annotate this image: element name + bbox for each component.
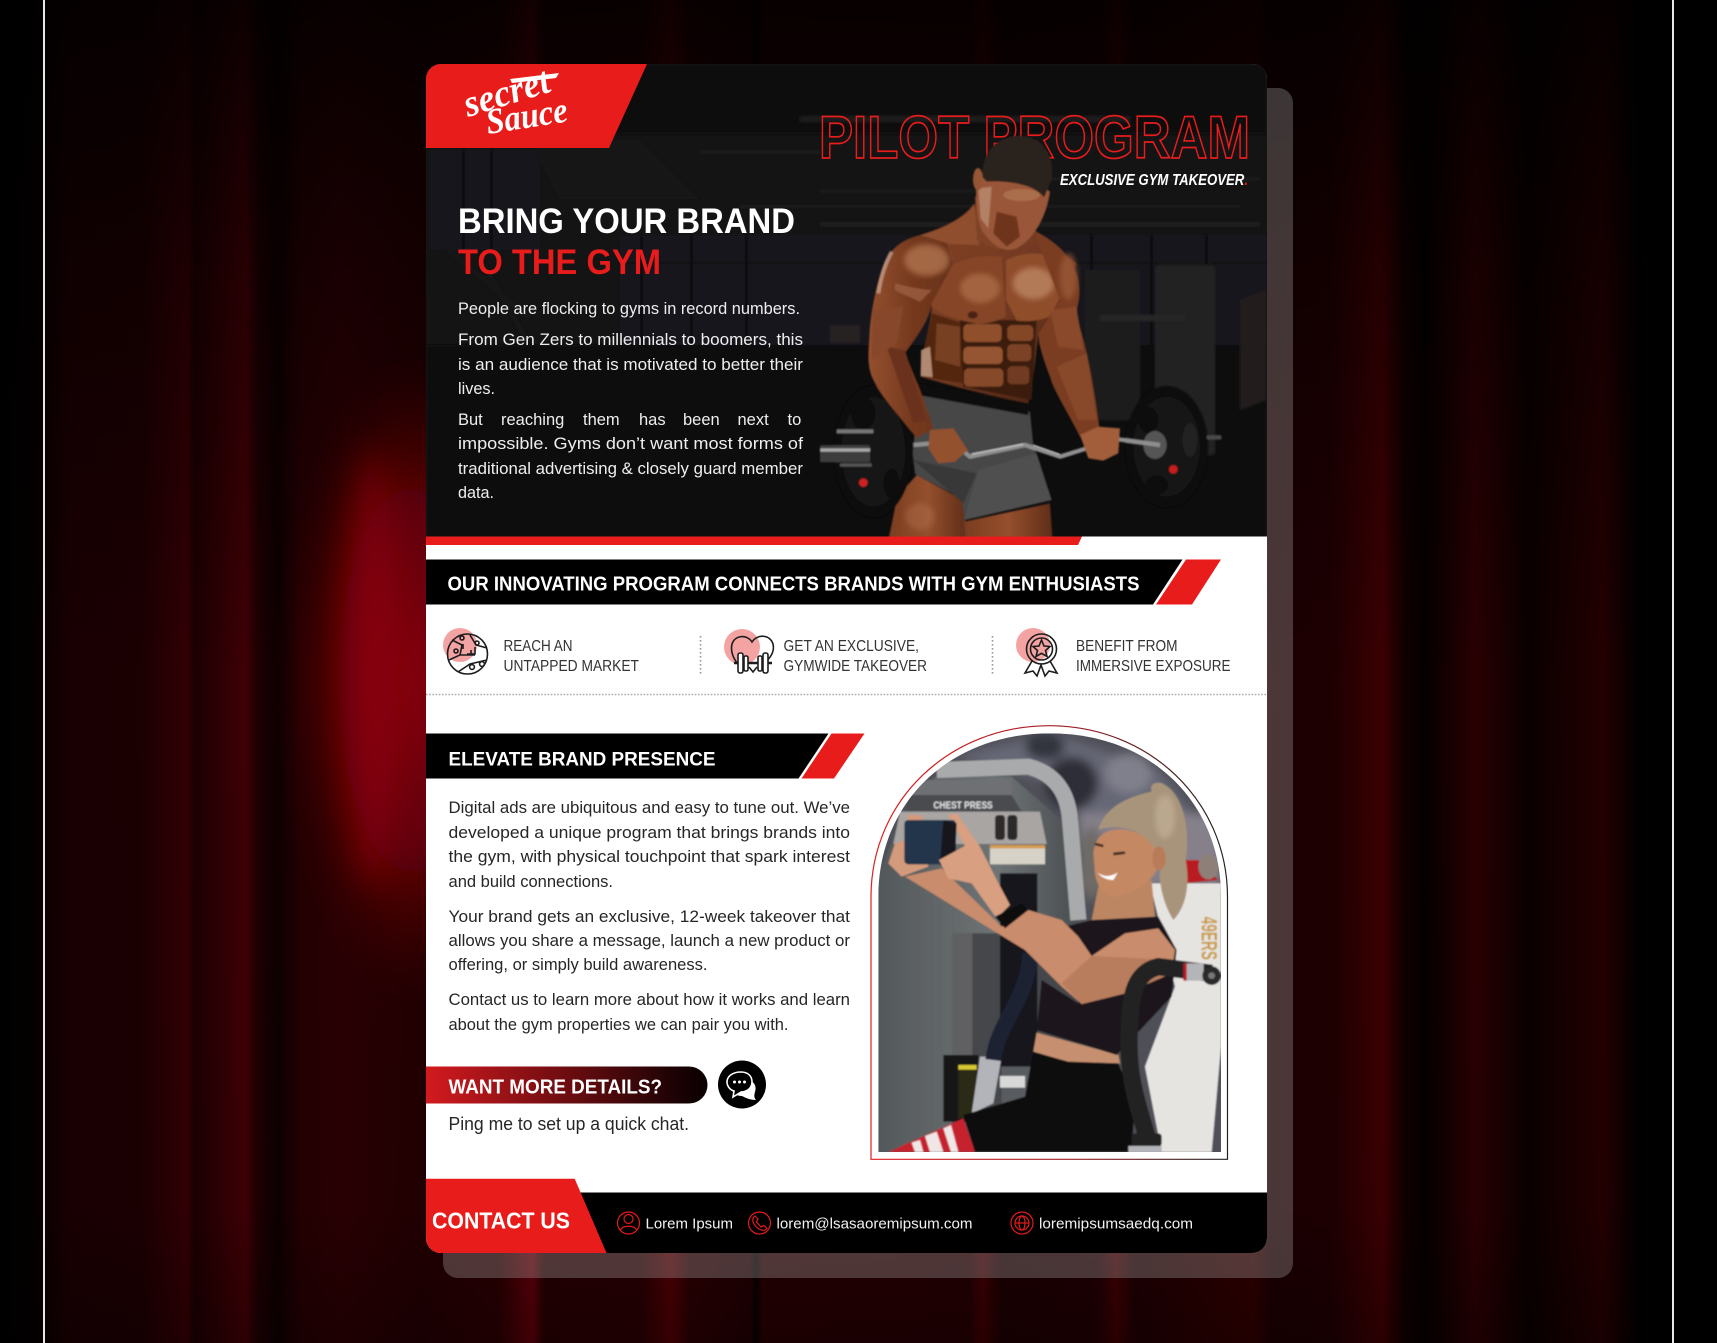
title: PILOT PROGRAM outline: PILOT PROGRAM	[819, 104, 1250, 171]
photo: woman taking a selfie on chest press: CHEST PRESS	[933, 801, 993, 812]
feature: immersive exposure	[1016, 628, 1230, 676]
text block: hero intro: People are flocking to gyms in record numbers.	[458, 300, 800, 318]
feature: immersive exposure: BENEFIT FROM	[1076, 638, 1178, 655]
icon: chat bubbles	[718, 1060, 766, 1108]
text block: elevate copy: Your brand gets an exclusive, 12-week takeover that	[448, 908, 850, 926]
contact: email: lorem@lsasaoremipsum.com	[776, 1216, 972, 1232]
footer	[426, 1179, 1267, 1254]
text block: hero intro: From Gen Zers to millennials to boomers, this	[458, 331, 803, 349]
banner: elevate brand presence: ELEVATE BRAND PRESENCE	[448, 748, 716, 770]
text block: hero intro: next	[738, 411, 769, 429]
offset translucent shadow panel	[443, 88, 1293, 1278]
text block: hero intro: been	[683, 411, 720, 429]
icon: market map globe	[443, 628, 488, 674]
text block: hero intro: impossible. Gyms don’t want most forms of	[458, 435, 803, 453]
text block: hero intro: is an audience that is motivated to better their	[458, 356, 804, 374]
text block: hero intro: reaching	[501, 411, 564, 429]
divider dotted	[426, 694, 1267, 696]
text block: hero intro: them	[583, 411, 620, 429]
text block: elevate copy: and build connections.	[448, 873, 613, 891]
feature: exclusive gymwide takeover: GET AN EXCLUSIVE,	[784, 638, 919, 655]
feature: reach an untapped market	[443, 628, 639, 675]
feature: immersive exposure: IMMERSIVE EXPOSURE	[1076, 658, 1230, 675]
logo tab	[426, 59, 647, 148]
feature: reach an untapped market: REACH AN	[504, 638, 572, 655]
text block: elevate copy: about the gym properties we can pair you with.	[448, 1016, 788, 1034]
divider dotted	[700, 636, 702, 676]
text block: hero intro	[458, 300, 804, 502]
red strip under hero	[426, 536, 1082, 545]
flyer card	[426, 59, 1267, 1253]
banner: program connects brands	[426, 560, 1221, 604]
banner: program connects brands: OUR INNOVATING PROGRAM CONNECTS BRANDS WITH GYM ENTHUSIASTS	[448, 574, 1140, 596]
photo: woman taking a selfie on chest press: 49ERS	[1197, 917, 1222, 960]
contact: website: loremipsumsaedq.com	[1039, 1216, 1193, 1232]
text block: elevate copy: Contact us to learn more about how it works and learn	[448, 991, 850, 1009]
contact: name: Lorem Ipsum	[646, 1216, 733, 1232]
photo: woman taking a selfie on chest press	[875, 730, 1225, 1157]
logo: secret sauce	[466, 71, 567, 134]
feature: exclusive gymwide takeover: GYMWIDE TAKEOVER	[784, 658, 927, 675]
text block: elevate copy: Digital ads are ubiquitous and easy to tune out. We’ve	[448, 799, 850, 817]
photo: bodybuilder lifting barbell	[820, 136, 1222, 540]
contact: website	[1011, 1212, 1193, 1234]
decorative white vertical line right	[1672, 0, 1674, 1343]
heading: bring your brand: BRING YOUR BRAND	[458, 202, 795, 241]
text block: hero intro: to	[788, 411, 801, 429]
callout: want more details: WANT MORE DETAILS?	[448, 1076, 662, 1098]
text block: hero intro: lives.	[458, 380, 495, 398]
tab: contact us	[426, 1179, 606, 1253]
text block: hero intro: data.	[458, 484, 494, 502]
tab: contact us: CONTACT US	[432, 1208, 570, 1234]
feature: reach an untapped market: UNTAPPED MARKET	[504, 658, 639, 675]
logo: secret sauce: Sauce	[483, 90, 570, 142]
heading: bring your brand: TO THE GYM	[458, 243, 661, 282]
subtitle: exclusive gym takeover: EXCLUSIVE GYM TAKEOVER.	[1060, 172, 1248, 189]
feature: exclusive gymwide takeover	[724, 629, 927, 675]
icon: heart with dumbbell	[724, 629, 773, 673]
text block: elevate copy: allows you share a message, launch a new product or	[448, 932, 851, 950]
callout: want more details	[426, 1066, 708, 1104]
text: ping me: Ping me to set up a quick chat.	[448, 1114, 689, 1134]
contact: name	[618, 1212, 733, 1234]
text block: hero intro: has	[639, 411, 666, 429]
text block: elevate copy: offering, or simply build awareness.	[448, 956, 708, 974]
decorative white vertical line left	[43, 0, 45, 1343]
icon: award medal	[1016, 628, 1057, 676]
text block: hero intro: But	[458, 411, 483, 429]
photo frame: arched outline	[871, 726, 1228, 1159]
banner: elevate brand presence	[426, 734, 864, 778]
text block: elevate copy: the gym, with physical touchpoint that spark interest	[448, 848, 850, 866]
logo: secret sauce: secret	[457, 59, 556, 126]
panel: hero gym background	[426, 64, 1267, 537]
contact: email	[748, 1212, 972, 1234]
text block: elevate copy	[448, 799, 851, 1034]
heading: bring your brand	[458, 202, 795, 282]
text block: hero intro: traditional advertising & closely guard member	[458, 460, 804, 478]
divider dotted	[992, 636, 994, 676]
text block: elevate copy: developed a unique program that brings brands into	[448, 824, 850, 842]
